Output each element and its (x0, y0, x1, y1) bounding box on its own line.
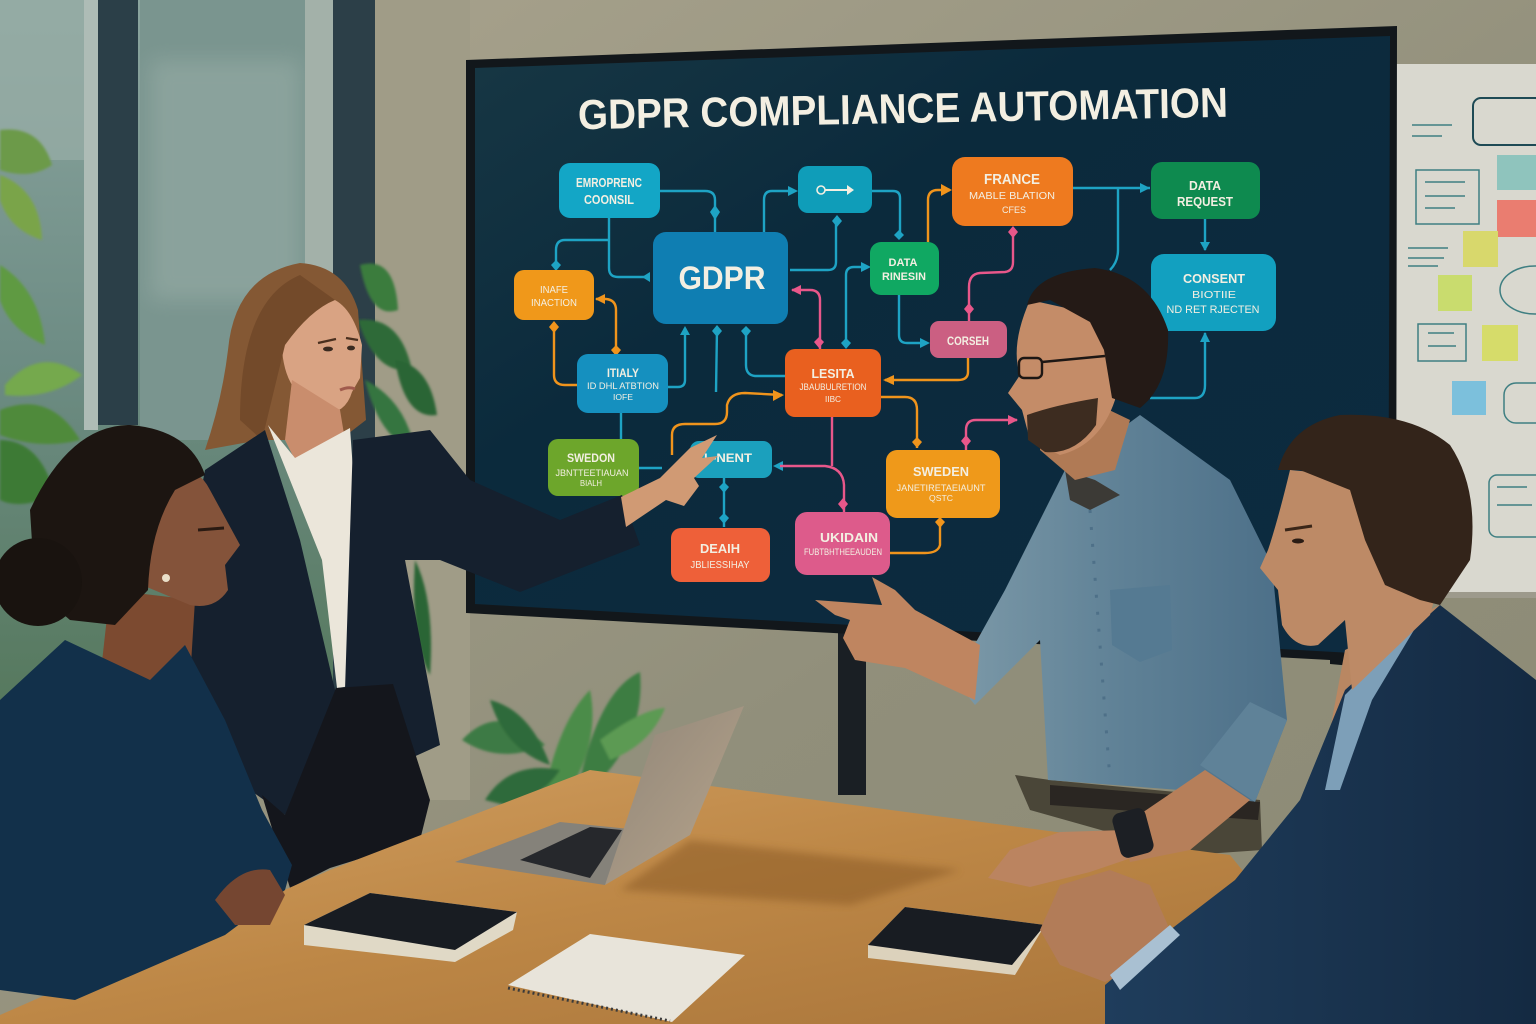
node: Sweden orange: QSTC (929, 493, 953, 503)
node: France: FRANCE (984, 172, 1040, 188)
node: Emroprenc Coonsil (559, 163, 660, 218)
node: France: CFES (1002, 205, 1026, 216)
node: Ukidain: UKIDAIN (820, 530, 878, 545)
notebook right (868, 907, 1045, 975)
node: L-nent (690, 441, 772, 478)
plant: left of window (0, 129, 82, 504)
connectors: teal (551, 183, 1210, 527)
node: Deaih: JBLIESSIHAY (690, 560, 750, 571)
node: Inafe Inaction (514, 270, 594, 320)
node: Inafe Inaction: INACTION (531, 298, 577, 309)
node: Corseh: CORSEH (947, 334, 989, 348)
person: presenter woman (175, 263, 718, 888)
node: Deaih: DEAIH (700, 541, 740, 556)
plant: below screen (462, 672, 665, 805)
table shadow (620, 840, 960, 905)
node: Data Request (1151, 162, 1260, 219)
table (0, 770, 1295, 1024)
node: Sweden orange: SWEDEN (913, 464, 969, 479)
node: Data Rinesin: DATA (888, 257, 918, 269)
node: Consent: ND RET RJECTEN (1166, 304, 1260, 316)
node: Data Rinesin (870, 242, 939, 295)
node: Consent (1151, 254, 1276, 331)
man's forearm and hand on table (988, 770, 1250, 887)
node: Consent: CONSENT (1183, 271, 1245, 286)
node: Italy (577, 354, 668, 413)
person: left seated woman (0, 425, 292, 1000)
node: Lesita: JBAUBULRETION (800, 382, 867, 393)
notepad (508, 934, 745, 1022)
node: Data Request: DATA (1189, 179, 1221, 193)
node: Sweden orange: JANETIRETAEIAUNT (896, 483, 986, 494)
node: GDPR (653, 232, 788, 324)
display screen (466, 26, 1397, 670)
node: Italy: IOFE (613, 392, 633, 402)
node: France: MABLE BLATION (969, 190, 1055, 202)
node: Emroprenc Coonsil: EMROPRENC (576, 176, 642, 190)
person: man in blue shirt (815, 268, 1287, 855)
node: GDPR: GDPR (678, 260, 766, 296)
node: Lesita: LESITA (812, 367, 854, 381)
node: Lesita (785, 349, 881, 417)
node: Emroprenc Coonsil: COONSIL (584, 193, 634, 207)
node: Sweden green (548, 439, 639, 496)
node: key icon (798, 166, 872, 213)
window with frames (0, 0, 470, 800)
node: Sweden green: SWEDON (567, 451, 615, 465)
node: France (952, 157, 1073, 226)
node: Corseh (930, 321, 1007, 358)
node: Consent: BIOTIIE (1192, 289, 1236, 301)
node: Deaih (671, 528, 770, 582)
node: Inafe Inaction: INAFE (540, 284, 568, 296)
node: Ukidain: FUBTBHTHEEAUDEN (804, 547, 882, 558)
node: Ukidain (795, 512, 890, 575)
connectors: pink (780, 226, 1018, 512)
title: GDPR COMPLIANCE AUTOMATION (578, 79, 1228, 138)
laptop (455, 706, 744, 885)
node: Sweden orange (886, 450, 1000, 518)
plant: behind presenter (358, 263, 448, 675)
node: Sweden green: JBNTTEETIAUAN (556, 468, 629, 479)
node: Italy: ID DHL ATBTION (587, 381, 659, 392)
person: right seated man (1040, 415, 1536, 1024)
node: Sweden green: BIALH (580, 478, 602, 488)
node: Data Request: REQUEST (1177, 195, 1233, 209)
whiteboard (1388, 64, 1536, 598)
node: Data Rinesin: RINESIN (882, 271, 926, 283)
stand (838, 630, 866, 795)
node: L-nent: L-NENT (704, 451, 753, 465)
notebook left (304, 893, 517, 962)
connectors: orange (549, 184, 968, 553)
node: Italy: ITIALY (607, 368, 639, 380)
node: Lesita: IIBC (825, 394, 841, 404)
